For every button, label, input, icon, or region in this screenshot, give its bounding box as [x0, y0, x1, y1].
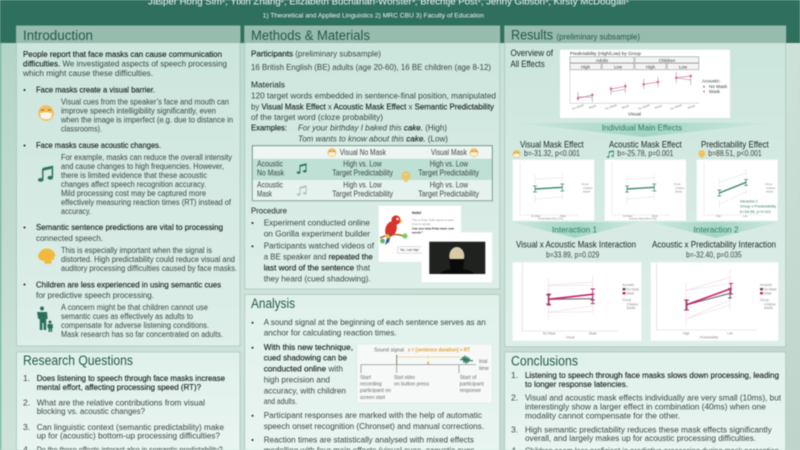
screenshot: masked speaker video [422, 232, 492, 282]
heading: analysis: Analysis [251, 296, 295, 311]
analysis bullets: With this new technique, [264, 342, 353, 352]
chart: acoustic mask effect: No Mask [623, 215, 633, 218]
analysis bullets: and adults. [264, 396, 297, 406]
screenshot: parrot instructions: This is Polly. Polly wants to learn [412, 218, 454, 222]
screenshot: parrot instructions: words? [411, 230, 423, 234]
chart: acoustic by predictability interaction [651, 262, 778, 341]
participants [251, 49, 491, 72]
analysis bullets [252, 317, 486, 450]
question list: What are the relative contributions from visual [37, 398, 205, 408]
materials: by Visual Mask Effect x Acoustic Mask Effect x Semantic Predictability [251, 102, 495, 112]
bullet: children: semantic cues as effectively as adults to [61, 312, 194, 321]
chart: visual by acoustic interaction: Mask [626, 291, 635, 295]
chart: visual by acoustic interaction [513, 262, 641, 341]
chart: acoustic mask effect: Children [675, 186, 685, 190]
chart: predictability by group overview: Visual [628, 112, 641, 118]
banner: individual main effects [510, 122, 777, 137]
diagram: reaction time timeline: Start video [394, 375, 415, 381]
bullet: acoustic changes: effectively measuring reaction times (RT) instead of [61, 198, 232, 207]
chart: acoustic mask effect [605, 160, 686, 221]
bullet: acoustic changes: Face masks cause acoustic changes. [36, 140, 161, 150]
design table: No Mask [257, 169, 284, 178]
question list: mental effort, affecting processing speed (RT)? [37, 382, 201, 392]
question list: up for (acoustic) bottom-up processing difficulties? [37, 431, 220, 441]
bullet: visual barrier: improve speech intelligibility significantly, even [61, 107, 216, 116]
chart: predictability by group overview: Children [659, 58, 676, 63]
analysis bullets: conducted online with [264, 363, 343, 373]
bullet: children: for predictive speech processing. [36, 290, 154, 300]
effect: acoustic mask: Acoustic Mask Effect [609, 139, 682, 149]
chart: predictability effect: Interaction 3 [740, 200, 758, 204]
materials: Tom wants to know about this cake. (Low) [298, 133, 448, 143]
materials: For your birthday I baked this cake. (High) [298, 123, 447, 133]
chart: predictability by group overview: Mask [709, 89, 721, 94]
chart: predictability by group overview: Acoustic: [702, 79, 721, 84]
chart: visual mask effect: Adults [583, 190, 591, 194]
overview label: Overview of [510, 48, 553, 58]
chart: visual by acoustic interaction: Mask [589, 332, 597, 336]
bullet: visual barrier: Visual cues from the speaker’s face and mouth can [61, 98, 229, 107]
procedure: they heard (cued shadowing). [264, 273, 371, 283]
chart: acoustic mask effect: Acoustic Mask Effect Only [629, 218, 658, 220]
screenshot: parrot instructions: Hello! [412, 211, 421, 215]
diagram: reaction time timeline: recording [360, 382, 382, 388]
chart: predictability by group overview: Low [614, 65, 623, 70]
analysis bullets: Participant responses are marked with the help of automatic [264, 410, 483, 420]
chart: acoustic by predictability interaction: Predictability [700, 336, 718, 340]
analysis bullets: high precision and [264, 374, 330, 384]
bullet: children: Mask research has so far concentrated on adults. [61, 330, 223, 339]
overview label: All Effects [510, 59, 545, 69]
bullet: acoustic changes: For example, masks can reduce the overall intensity [61, 153, 232, 162]
conclusions list: 2. [511, 393, 518, 403]
question list: Can linguistic context (semantic predictability) make [37, 422, 224, 432]
bullet: semantic predictions: distorted. High predictability could reduce visual and [61, 255, 235, 264]
bullet: children: Children are less experienced in using semantic cues [36, 279, 221, 289]
design table: High vs. Low [430, 181, 468, 190]
chart: acoustic by predictability interaction: High [683, 332, 690, 336]
diagram: reaction time timeline: trial [479, 359, 487, 365]
banner: interaction 2: Interaction 2 [694, 224, 739, 234]
chart: predictability by group overview: Mask [654, 103, 663, 110]
intro paragraph: People report that face masks can cause communication [23, 49, 222, 59]
bullet: children: compensate for adverse listening conditions. [61, 321, 209, 330]
icon: head with brain [38, 248, 56, 264]
chart: predictability by group overview: Low [679, 65, 688, 70]
materials: Materials [251, 79, 285, 89]
bullet: acoustic changes [24, 140, 232, 216]
bullet: acoustic changes: there is limited evidence that these acoustic [61, 171, 207, 180]
conclusions list: High semantic predictability reduces these mask effects significantly [525, 424, 772, 434]
chart: predictability effect: b=34.96, p=0.022 [740, 210, 771, 214]
intro paragraph [22, 49, 227, 78]
conclusions list: Listening to speech through face masks slows down processing, leading [525, 370, 779, 380]
design table: Acoustic [257, 160, 283, 169]
procedure: Participants watched videos of [264, 241, 375, 251]
design table: High vs. Low [343, 181, 382, 190]
panel: introduction [16, 26, 240, 346]
chart: acoustic by predictability interaction: Acoustic [760, 283, 772, 287]
analysis bullets: Reaction times are statistically analysed with mixed effects [264, 434, 474, 444]
banner: interaction 2 [650, 222, 780, 238]
interaction 1 heading [516, 240, 636, 259]
diagram: reaction time timeline: Sound signal [374, 347, 404, 353]
design table: Acoustic [257, 181, 283, 190]
bullet: semantic predictions: connected speech. [36, 233, 103, 243]
effect: visual mask [513, 139, 594, 221]
diagram: reaction time timeline: x [427, 360, 430, 366]
chart: predictability by group overview: No Mask [669, 103, 683, 111]
conclusions list: interestingly show a larger effect in combination (40ms) when one [525, 402, 766, 412]
diagram: reaction time timeline: Start [360, 375, 372, 381]
chart: visual by acoustic interaction: Children [626, 302, 639, 306]
chart: predictability effect: Low [743, 215, 748, 218]
bullet: semantic predictions: Semantic sentence predictions are vital to processing [36, 222, 223, 232]
question list: blocking vs. acoustic changes? [37, 406, 145, 416]
chart: predictability by group overview: Mask [687, 103, 696, 110]
design table: Target Predictability [418, 169, 479, 178]
banner: interaction 1 [510, 222, 640, 238]
analysis bullets: speech onset recognition (Chronset) and manual corrections. [264, 421, 484, 431]
question list: 2. [23, 398, 30, 408]
bullet: children: A concern might be that children cannot use [61, 303, 209, 312]
chart: predictability by group overview: No Mask [571, 103, 585, 111]
bullet: acoustic changes: and cause changes to high frequencies. However, [61, 162, 224, 171]
chart: acoustic mask effect: Adults [675, 190, 683, 194]
bullet: semantic predictions [24, 222, 237, 273]
bullet: acoustic changes: changes affect speech recognition accuracy. [61, 180, 206, 189]
affiliations: 1) Theoretical and Applied Linguistics 2) MRC CBU 3) Faculty of Education [263, 12, 484, 20]
design table: High vs. Low [343, 160, 382, 169]
screenshot: parrot instructions: Can you help Polly learn new [412, 227, 455, 231]
design table: Visual No Mask [340, 148, 386, 157]
design table [252, 146, 492, 201]
effect: acoustic mask: b=-25.78, p=0.001 [617, 149, 673, 158]
chart: acoustic by predictability interaction: Children [764, 302, 776, 306]
chart: predictability effect: Group x Predictability [740, 205, 776, 209]
materials: of the target word (cloze probability) [251, 112, 383, 122]
effect: predictability [697, 139, 778, 221]
interaction 2 heading: Acoustic x Predictability Interaction [652, 240, 776, 250]
diagram: reaction time timeline: participant on [360, 388, 391, 394]
interaction 2 heading [652, 240, 776, 259]
panel: analysis [245, 294, 500, 450]
chart: predictability effect: Adults [766, 190, 774, 194]
design table: Target Predictability [418, 190, 479, 199]
screenshot: parrot instructions [379, 206, 461, 262]
effect: acoustic mask [605, 139, 686, 221]
overview label [510, 48, 553, 69]
heading: methods and materials: Methods & Materials [251, 28, 370, 43]
conclusions list: overall, and largely makes up for acoustic processing difficulties. [525, 433, 756, 443]
chart: acoustic by predictability interaction: Mask [764, 291, 772, 295]
chart: predictability by group overview: High [581, 65, 591, 70]
chart: visual by acoustic interaction: Group [622, 298, 631, 302]
materials: Examples: [251, 123, 287, 133]
procedure: last word of the sentence that [264, 262, 371, 272]
chart: visual by acoustic interaction: Acoustic [622, 283, 635, 287]
bullet: children [24, 279, 223, 339]
diagram: reaction time timeline: Start of [460, 375, 477, 381]
icon: masked face [38, 105, 54, 121]
chart: visual by acoustic interaction: Adults [626, 306, 636, 310]
conclusions list: 1. [511, 370, 518, 380]
procedure [251, 205, 375, 283]
heading: conclusions: Conclusions [511, 353, 578, 368]
diagram: reaction time timeline: time [479, 366, 489, 372]
analysis bullets: cued shadowing can be [264, 353, 347, 363]
icon: parent and child [37, 306, 53, 332]
conclusions list [511, 370, 782, 450]
screenshot: parrot instructions: Yes, I can help! [400, 248, 419, 252]
bullet: acoustic changes: accuracy. [61, 207, 91, 216]
chart: visual by acoustic interaction: No Mask [626, 287, 639, 291]
chart: predictability effect: High [716, 215, 722, 218]
diagram: reaction time timeline: screen start [360, 395, 386, 401]
bullet: visual barrier: Face masks create a visual barrier. [36, 84, 155, 94]
chart: predictability by group overview: Adults [596, 58, 609, 63]
diagram: reaction time timeline [357, 344, 492, 403]
conclusions list: 3. [511, 424, 518, 434]
chart: predictability effect: Children [766, 186, 776, 190]
diagram: reaction time timeline: response [460, 388, 481, 394]
chart: visual mask effect: Group [582, 182, 589, 186]
procedure: on Gorilla experiment builder [264, 229, 370, 239]
panel: results [505, 26, 786, 347]
analysis bullets: accuracy, with children [264, 385, 346, 395]
chart: predictability by group overview: Mask [588, 103, 597, 110]
chart: predictability by group overview: High [646, 65, 656, 70]
banner: interaction 1: Interaction 1 [552, 224, 597, 234]
bullet: visual barrier: when the image is imperfect (e.g. due to distance in [60, 116, 233, 125]
chart: acoustic mask effect: Group [674, 182, 681, 186]
chart: predictability by group overview: No Mask [604, 103, 618, 111]
design table: High vs. Low [430, 160, 468, 169]
screenshot: parrot instructions: how to speak. [412, 222, 431, 226]
conclusions list: to longer response latencies. [525, 379, 628, 389]
design table: Mask [257, 190, 272, 199]
chart: acoustic by predictability interaction: Adults [764, 306, 773, 310]
heading: research questions: Research Questions [23, 353, 133, 368]
banner: individual main effects: Individual Main Effects [602, 122, 682, 132]
chart: predictability by group overview: Predictability (High/Low) by Group [570, 51, 642, 56]
design table: Visual Mask [431, 148, 467, 157]
panel: conclusions [505, 352, 786, 450]
chart: visual mask effect: Mask [560, 215, 567, 218]
materials [251, 79, 496, 143]
diagram: reaction time timeline: participant [460, 382, 484, 388]
procedure: Experiment conducted online [264, 217, 370, 227]
chart: visual mask effect: Visual Mask Effect Only [538, 218, 564, 220]
chart: predictability by group overview [560, 50, 730, 118]
design table: Target Predictability [332, 190, 393, 199]
intro paragraph: which might cause these difficulties. [22, 68, 153, 78]
analysis bullets: anchor for calculating reaction times. [264, 328, 397, 338]
design table: Target Predictability [332, 169, 393, 178]
chart: visual mask effect [513, 160, 594, 221]
interaction 2 heading: b=-32.40, p=0.035 [686, 250, 742, 259]
chart: acoustic by predictability interaction: No Mask [764, 287, 777, 291]
chart: predictability effect: Group [765, 182, 773, 186]
participants: 16 British English (BE) adults (age 20-60), 16 BE children (age 8-12) [251, 62, 491, 72]
procedure: Procedure [251, 205, 287, 215]
chart: predictability by group overview: No Mask [709, 84, 728, 89]
icon: music note [38, 166, 53, 182]
chart: visual mask effect: No Mask [531, 215, 541, 218]
panel: research questions [16, 352, 240, 450]
chart: visual by acoustic interaction: No Mask [543, 332, 556, 336]
bullet: semantic predictions: auditory processing difficulties caused by face masks. [61, 264, 237, 273]
chart: predictability effect [697, 160, 778, 221]
bullet: visual barrier [24, 84, 233, 134]
panel: methods and materials [245, 26, 500, 289]
interaction 1 heading: b=33.89, p=0.029 [546, 250, 599, 259]
chart: visual mask effect: Children [583, 186, 593, 190]
effect: predictability: b=88.51, p<0.001 [708, 149, 762, 158]
effect: predictability: Predictability Effect [701, 139, 769, 149]
chart: predictability by group overview: No Mask [637, 103, 651, 111]
effect: visual mask: Visual Mask Effect [520, 139, 584, 149]
bullet: acoustic changes: Mild processing cost may be captured more [61, 189, 207, 198]
analysis bullets: A sound signal at the beginning of each sentence serves as an [264, 317, 486, 327]
bullet: semantic predictions: This is especially important when the signal is [61, 246, 212, 255]
question list [23, 373, 225, 450]
intro paragraph: difficulties. We investigated aspects of speech processing [23, 58, 227, 68]
conclusions list: modality cannot compensate for the other. [525, 410, 680, 420]
question list: 1. [23, 373, 30, 383]
effect: visual mask: b=-31.32, p<0.001 [524, 149, 580, 158]
procedure: a BE speaker and repeated the [264, 252, 373, 262]
bullet: visual barrier: classrooms). [61, 125, 102, 134]
materials: 120 target words embedded in sentence-final position, manipulated [251, 91, 496, 101]
chart: acoustic mask effect: Mask [652, 215, 659, 218]
question list: Does listening to speech through face masks increase [37, 373, 225, 383]
diagram: reaction time timeline: on button press [394, 382, 429, 388]
chart: predictability by group overview: Mask [621, 103, 630, 110]
heading: introduction: Introduction [23, 28, 93, 43]
chart: visual by acoustic interaction: Visual [566, 336, 575, 340]
chart: acoustic by predictability interaction: Low [727, 332, 734, 336]
conclusions list: Visual and acoustic mask effects individually are very small (10ms), but [525, 393, 782, 403]
heading: results: Results (preliminary subsample) [511, 27, 640, 42]
diagram: reaction time timeline: x = [sentence duration] + RT [408, 347, 471, 353]
question list: 3. [23, 422, 30, 432]
participants: Participants (preliminary subsample) [251, 49, 381, 59]
chart: acoustic by predictability interaction: Group [760, 298, 769, 302]
interaction 1 heading: Visual x Acoustic Mask Interaction [516, 240, 636, 250]
